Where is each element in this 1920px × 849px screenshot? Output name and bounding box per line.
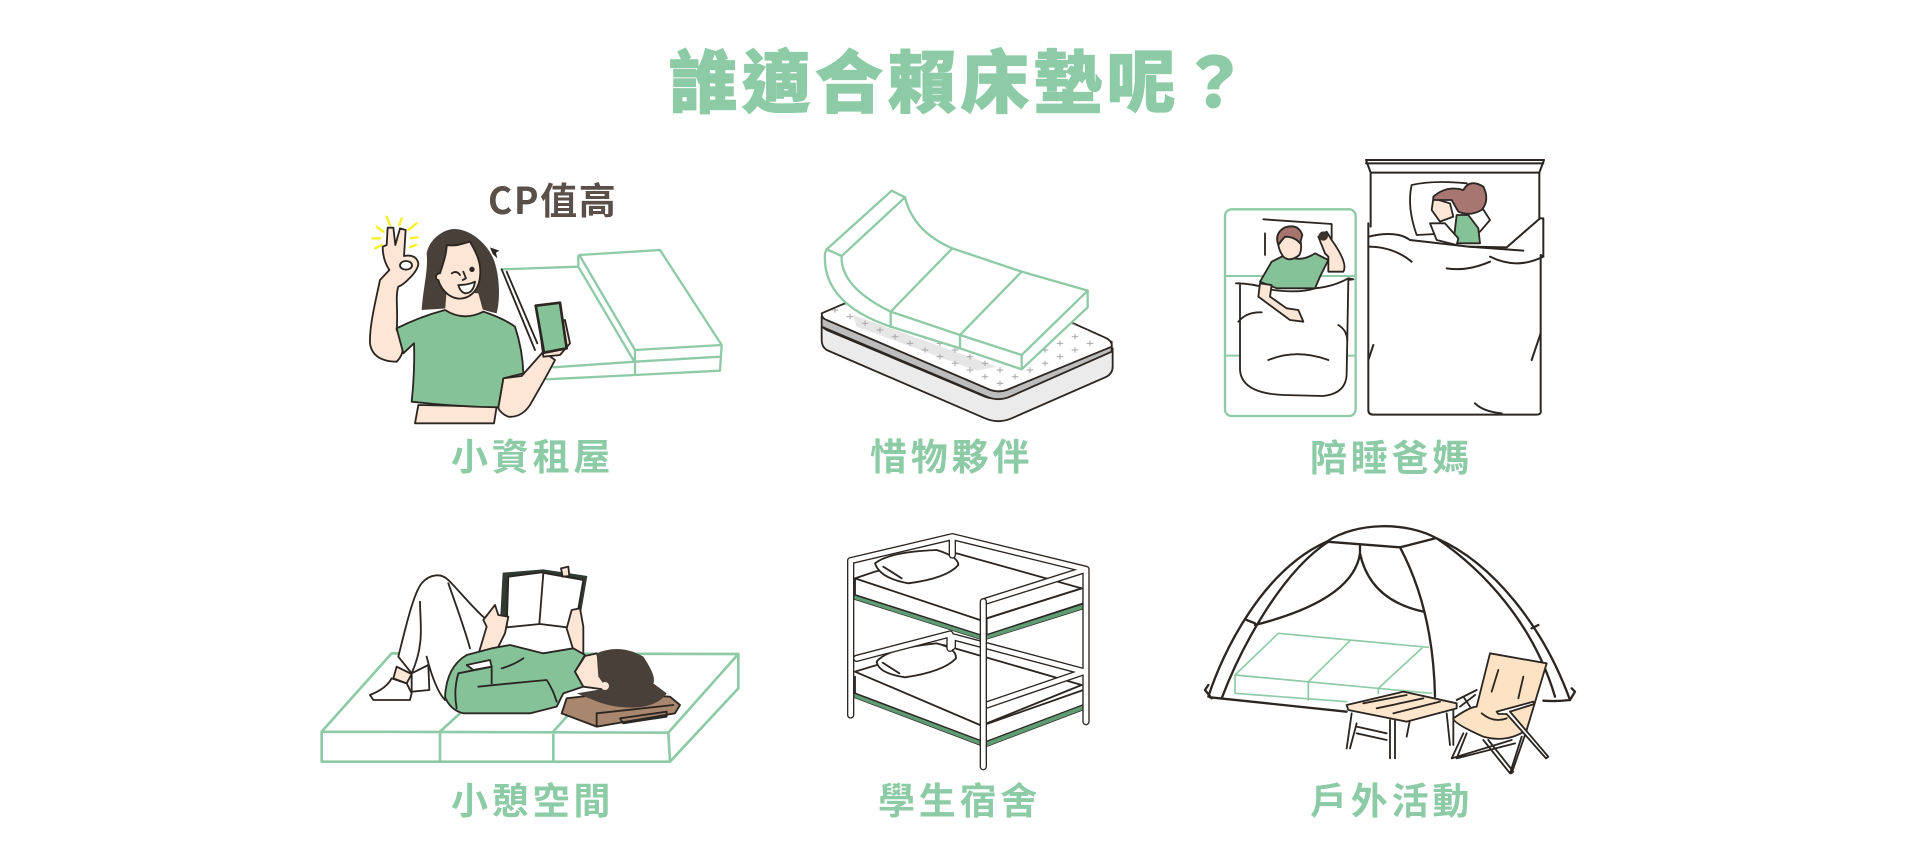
panel: 學生宿舍 xyxy=(851,537,1086,825)
woman xyxy=(370,228,570,423)
panel: 陪睡爸媽 xyxy=(1225,160,1544,482)
panel: 戶外活動 xyxy=(1205,526,1575,825)
panel: 小憩空間 xyxy=(322,567,738,825)
folded mattress xyxy=(502,250,722,379)
foam topper xyxy=(825,191,1088,369)
green single mattress xyxy=(1225,209,1356,416)
label: 小憩空間 xyxy=(451,771,614,825)
illustration: parents sleeping xyxy=(1225,160,1544,416)
mattress in tent xyxy=(1235,633,1432,702)
camp table xyxy=(1347,692,1457,758)
label: 學生宿舍 xyxy=(878,771,1041,825)
icon: yellow sparkle xyxy=(372,217,417,248)
title: 誰適合賴床墊呢？ xyxy=(669,28,1253,127)
camp chair xyxy=(1452,653,1548,773)
label: 戶外活動 xyxy=(1310,771,1473,825)
tent xyxy=(1205,526,1575,712)
label: 惜物夥伴 xyxy=(870,427,1033,481)
panel: 小資租屋 xyxy=(370,171,722,481)
panel: 惜物夥伴 xyxy=(822,191,1113,481)
illustration: mattress topper on old mattress xyxy=(822,191,1113,421)
bed boards and mattress xyxy=(854,553,1083,747)
frame tubes xyxy=(851,537,1086,767)
illustration: tent and camp chair xyxy=(1205,526,1575,773)
illustration: reading on mattress xyxy=(322,567,738,762)
person xyxy=(370,567,680,727)
illustration: renter with phone and folded mattress xyxy=(370,217,722,423)
pillows xyxy=(875,550,958,677)
double bed xyxy=(1366,160,1544,415)
green mattress xyxy=(322,653,738,762)
man in bed xyxy=(1236,219,1353,396)
illustration: bunk bed xyxy=(851,537,1086,767)
book xyxy=(500,567,587,628)
callout: CP值高: CP值高 xyxy=(488,171,617,225)
old mattress xyxy=(822,303,1113,421)
label: 小資租屋 xyxy=(451,427,614,481)
label: 陪睡爸媽 xyxy=(1310,428,1473,482)
